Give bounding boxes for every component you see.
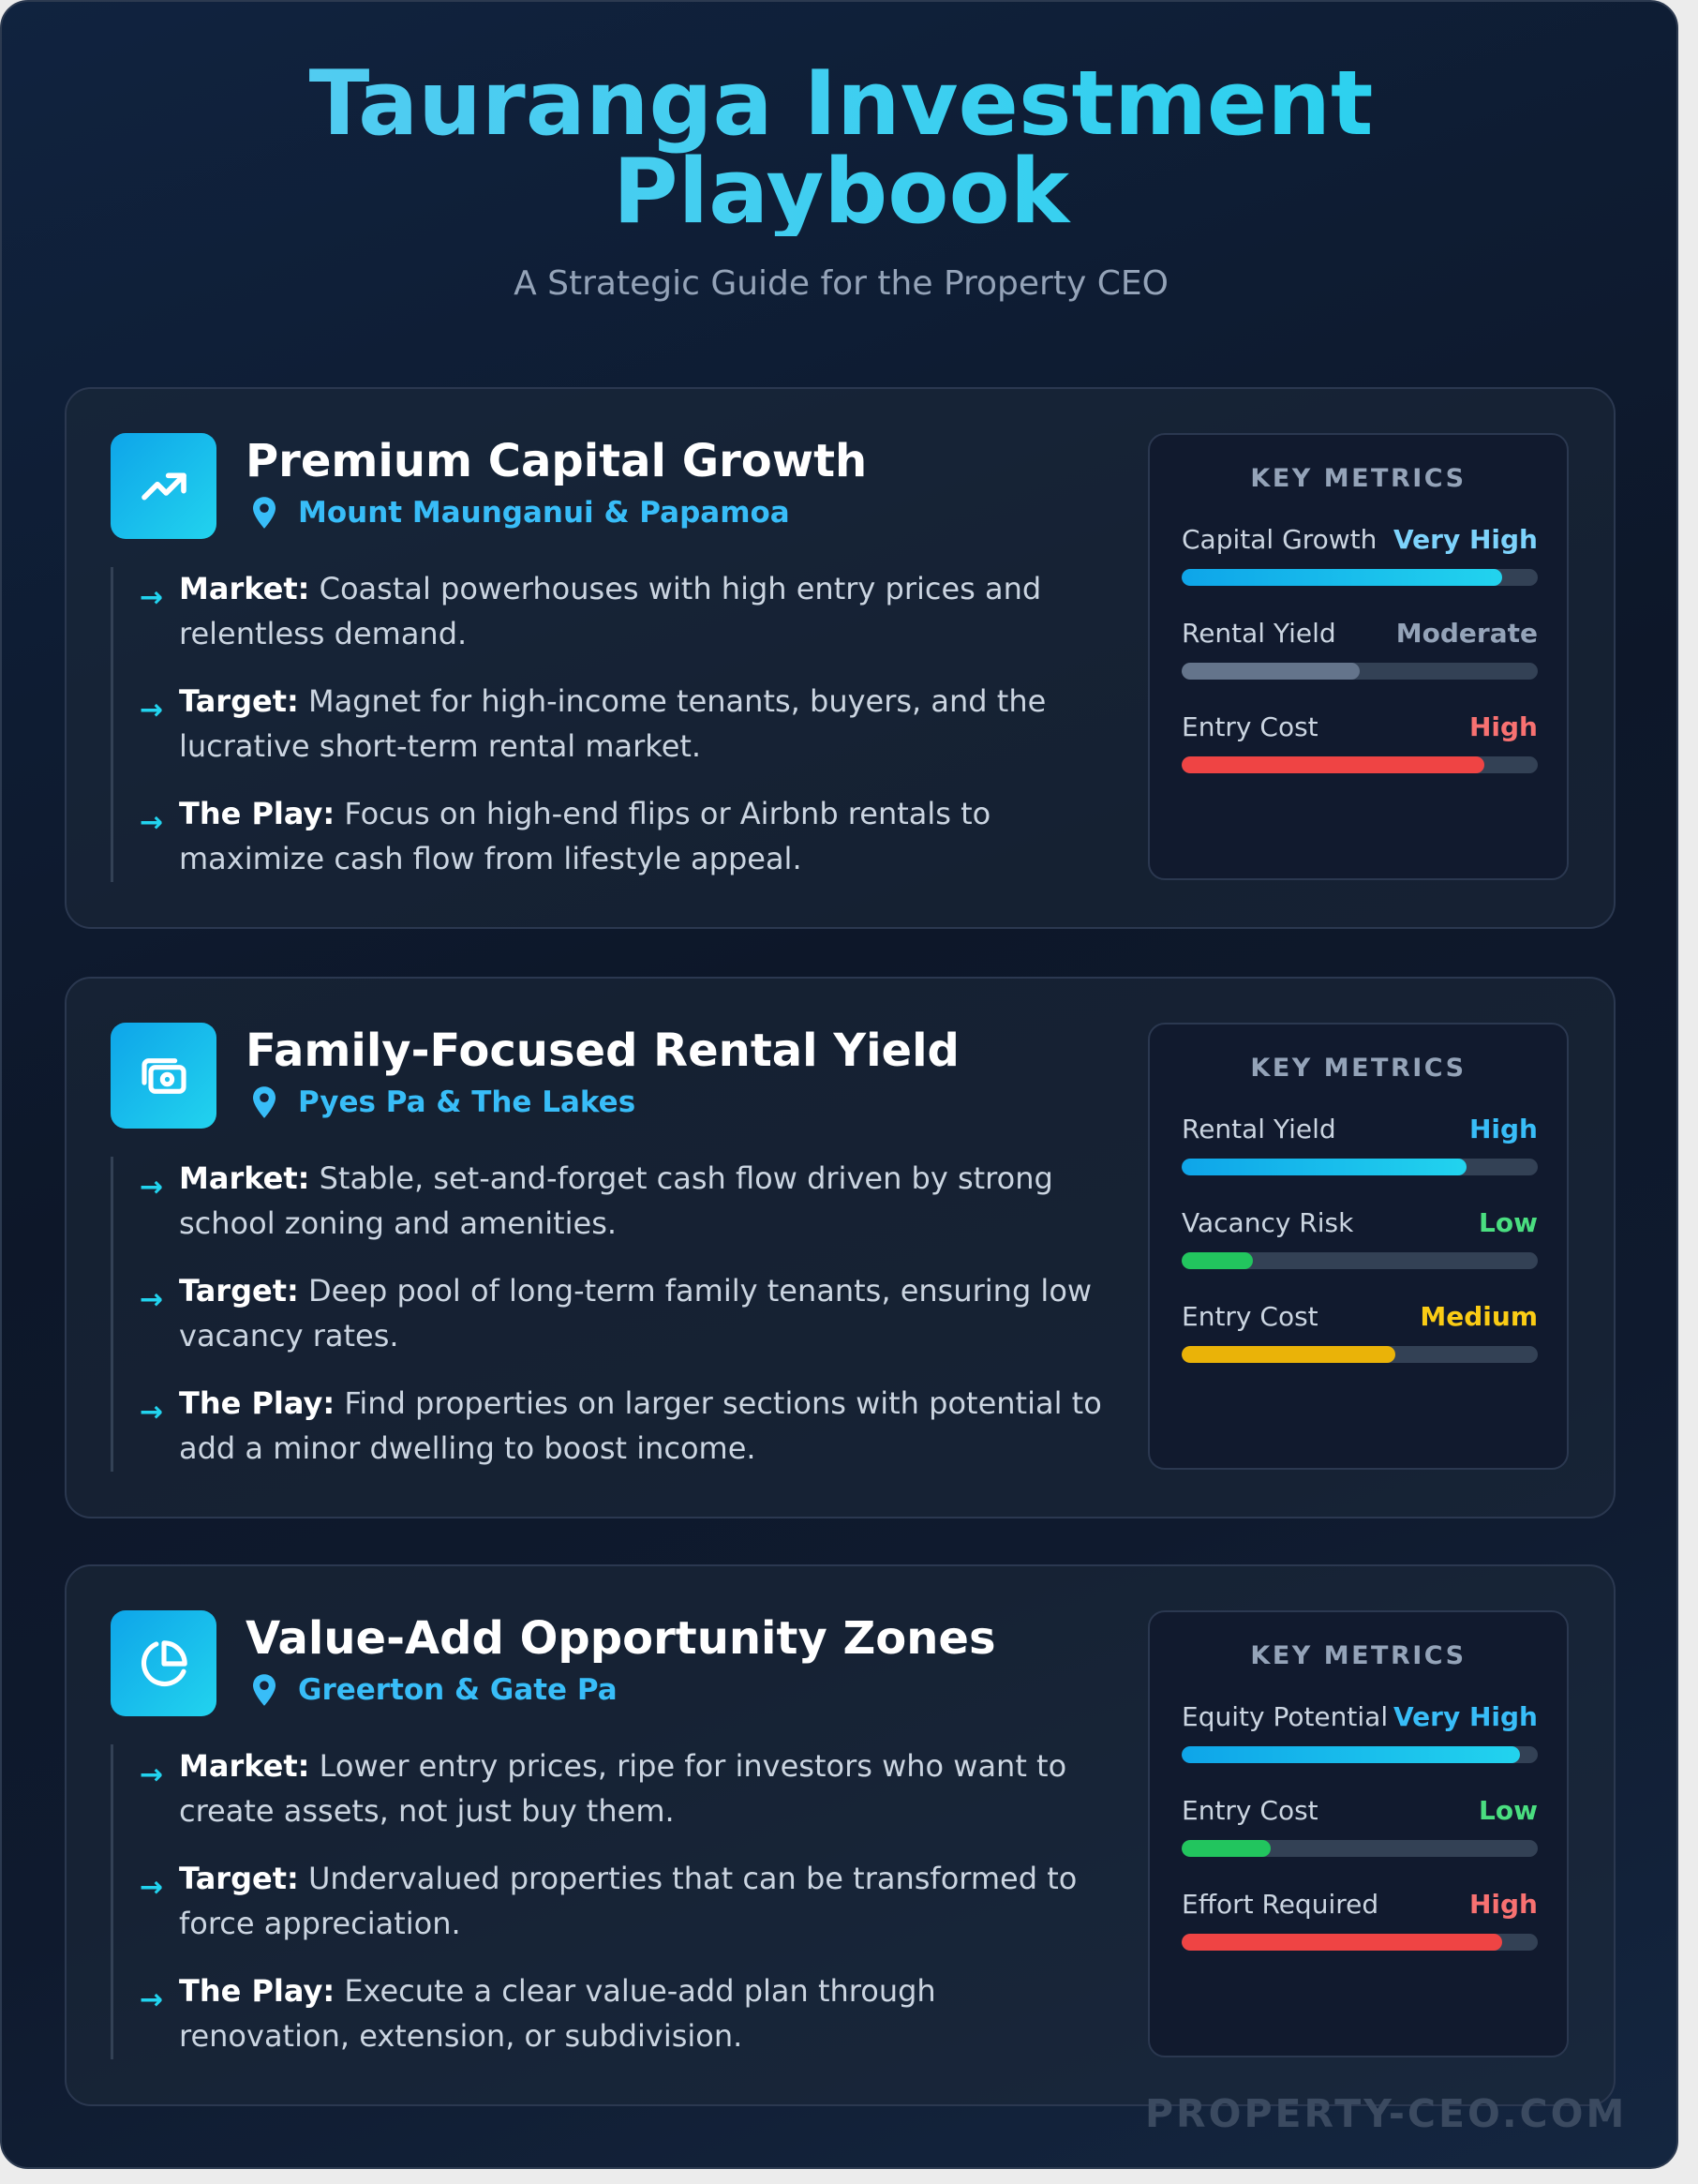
bullets: school zoning and amenities. bbox=[179, 1205, 617, 1241]
key metrics: Vacancy Risk bbox=[1182, 1207, 1353, 1238]
key metrics: High bbox=[1469, 1114, 1538, 1144]
icon: trending up bbox=[111, 433, 216, 539]
location: Pyes Pa & The Lakes bbox=[298, 1085, 635, 1119]
bullets: Market: Coastal powerhouses with high entry prices and bbox=[179, 571, 1041, 606]
key metrics bbox=[1148, 1023, 1569, 1470]
key metrics: Low bbox=[1479, 1207, 1538, 1238]
bullets: vacancy rates. bbox=[179, 1318, 399, 1354]
key metrics: Equity Potential bbox=[1182, 1701, 1388, 1732]
key metrics: Moderate bbox=[1396, 618, 1538, 649]
bullets: create assets, not just buy them. bbox=[179, 1793, 675, 1829]
key metrics: High bbox=[1469, 711, 1538, 742]
title bbox=[2, 60, 1680, 236]
panel: family-focused rental yield bbox=[65, 977, 1616, 1518]
key metrics: Medium bbox=[1420, 1301, 1538, 1332]
bullets: The Play: Execute a clear value-add plan through bbox=[179, 1973, 936, 2009]
key metrics bbox=[1148, 433, 1569, 880]
key metrics: Entry Cost bbox=[1182, 1301, 1318, 1332]
bullets: → bbox=[140, 1396, 163, 1429]
bullets: → bbox=[140, 694, 163, 726]
bullets: Target: Undervalued properties that can be transformed to bbox=[179, 1861, 1077, 1896]
subtitle: A Strategic Guide for the Property CEO bbox=[514, 264, 1169, 303]
bullets: → bbox=[140, 1171, 163, 1204]
bullets: → bbox=[140, 806, 163, 839]
bullets: → bbox=[140, 1871, 163, 1904]
key metrics: Entry Cost bbox=[1182, 1795, 1318, 1826]
watermark: PROPERTY-CEO.COM bbox=[1145, 2091, 1627, 2136]
key metrics: Low bbox=[1479, 1795, 1538, 1826]
key metrics bbox=[1148, 1610, 1569, 2057]
heading: Family-Focused Rental Yield bbox=[246, 1025, 960, 1077]
key metrics: Very High bbox=[1393, 1701, 1538, 1732]
bullets: Target: Magnet for high-income tenants, buyers, and the bbox=[179, 683, 1046, 719]
key metrics: High bbox=[1469, 1889, 1538, 1920]
bullets: add a minor dwelling to boost income. bbox=[179, 1430, 756, 1466]
bullets: Market: Lower entry prices, ripe for investors who want to bbox=[179, 1748, 1066, 1784]
key metrics: KEY METRICS bbox=[1250, 1054, 1467, 1083]
panel: value-add opportunity zones bbox=[65, 1564, 1616, 2106]
bullets: Market: Stable, set-and-forget cash flow driven by strong bbox=[179, 1160, 1053, 1196]
bullets bbox=[140, 1160, 1102, 1466]
location: Greerton & Gate Pa bbox=[298, 1673, 618, 1707]
key metrics: Capital Growth bbox=[1182, 524, 1377, 555]
bullets: maximize cash flow from lifestyle appeal. bbox=[179, 841, 802, 876]
icon: cash bbox=[111, 1023, 216, 1129]
key metrics: Effort Required bbox=[1182, 1889, 1378, 1920]
bullets bbox=[140, 571, 1046, 876]
title: Playbook bbox=[613, 141, 1069, 244]
key metrics: Rental Yield bbox=[1182, 1114, 1336, 1144]
bullets: → bbox=[140, 581, 163, 614]
icon: pie chart bbox=[111, 1610, 216, 1716]
key metrics: Very High bbox=[1393, 524, 1538, 555]
location: Mount Maunganui & Papamoa bbox=[298, 496, 790, 530]
heading: Value-Add Opportunity Zones bbox=[246, 1612, 996, 1665]
title: Tauranga Investment bbox=[309, 52, 1373, 156]
bullets: relentless demand. bbox=[179, 616, 467, 651]
bullets: force appreciation. bbox=[179, 1906, 461, 1941]
key metrics: Entry Cost bbox=[1182, 711, 1318, 742]
bullets: Target: Deep pool of long-term family tenants, ensuring low bbox=[179, 1273, 1092, 1309]
bullets: The Play: Find properties on larger sections with potential to bbox=[179, 1385, 1102, 1421]
heading: Premium Capital Growth bbox=[246, 435, 867, 487]
bullets: renovation, extension, or subdivision. bbox=[179, 2018, 742, 2054]
key metrics: KEY METRICS bbox=[1250, 1641, 1467, 1670]
bullets: → bbox=[140, 1283, 163, 1316]
bullets: → bbox=[140, 1758, 163, 1791]
key metrics: KEY METRICS bbox=[1250, 464, 1467, 493]
bullets: lucrative short-term rental market. bbox=[179, 728, 701, 764]
bullets: → bbox=[140, 1983, 163, 2016]
bullets: The Play: Focus on high-end flips or Airbnb rentals to bbox=[179, 796, 990, 831]
bullets bbox=[140, 1748, 1077, 2054]
key metrics: Rental Yield bbox=[1182, 618, 1336, 649]
panel: premium capital growth bbox=[65, 387, 1616, 929]
